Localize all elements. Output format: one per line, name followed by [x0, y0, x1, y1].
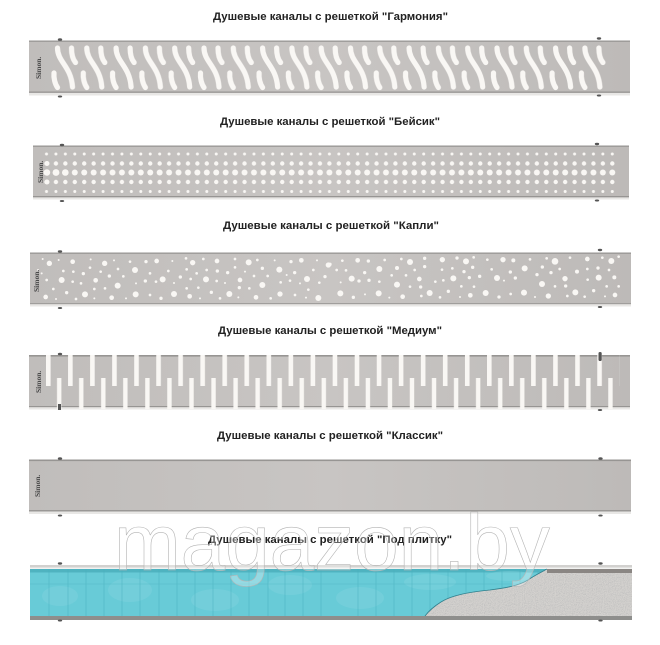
tile surface — [30, 569, 550, 616]
panel: Гармония grate — [29, 37, 630, 98]
watermark: magazon.by — [114, 498, 550, 587]
title: Гармония: Душевые каналы с решеткой "Гармония" — [213, 11, 448, 23]
panel: Бейсик grate — [33, 143, 629, 202]
panel: Бейсик grate: Simon. — [36, 161, 45, 183]
title: Медиум: Душевые каналы с решеткой "Медиум" — [218, 325, 442, 337]
panel: Классик grate: Simon. — [33, 475, 42, 497]
panel: Капли grate — [30, 249, 631, 309]
panel: Медиум grate: Simon. — [34, 371, 43, 393]
title: Бейсик: Душевые каналы с решеткой "Бейсик" — [220, 116, 440, 128]
panel: Медиум grate — [29, 352, 630, 411]
title: Капли: Душевые каналы с решеткой "Капли" — [223, 220, 439, 232]
panel: Классик grate — [29, 457, 631, 516]
speckled grate surface — [420, 569, 632, 616]
title: Под плитку: Душевые каналы с решеткой "Под плитку" — [208, 534, 452, 546]
panel: Под плитку grate — [30, 562, 632, 622]
panel: Гармония grate: Simon. — [34, 57, 43, 79]
title: Классик: Душевые каналы с решеткой "Классик" — [217, 430, 443, 442]
panel: Капли grate: Simon. — [32, 270, 41, 292]
tile torn edge — [425, 569, 547, 616]
